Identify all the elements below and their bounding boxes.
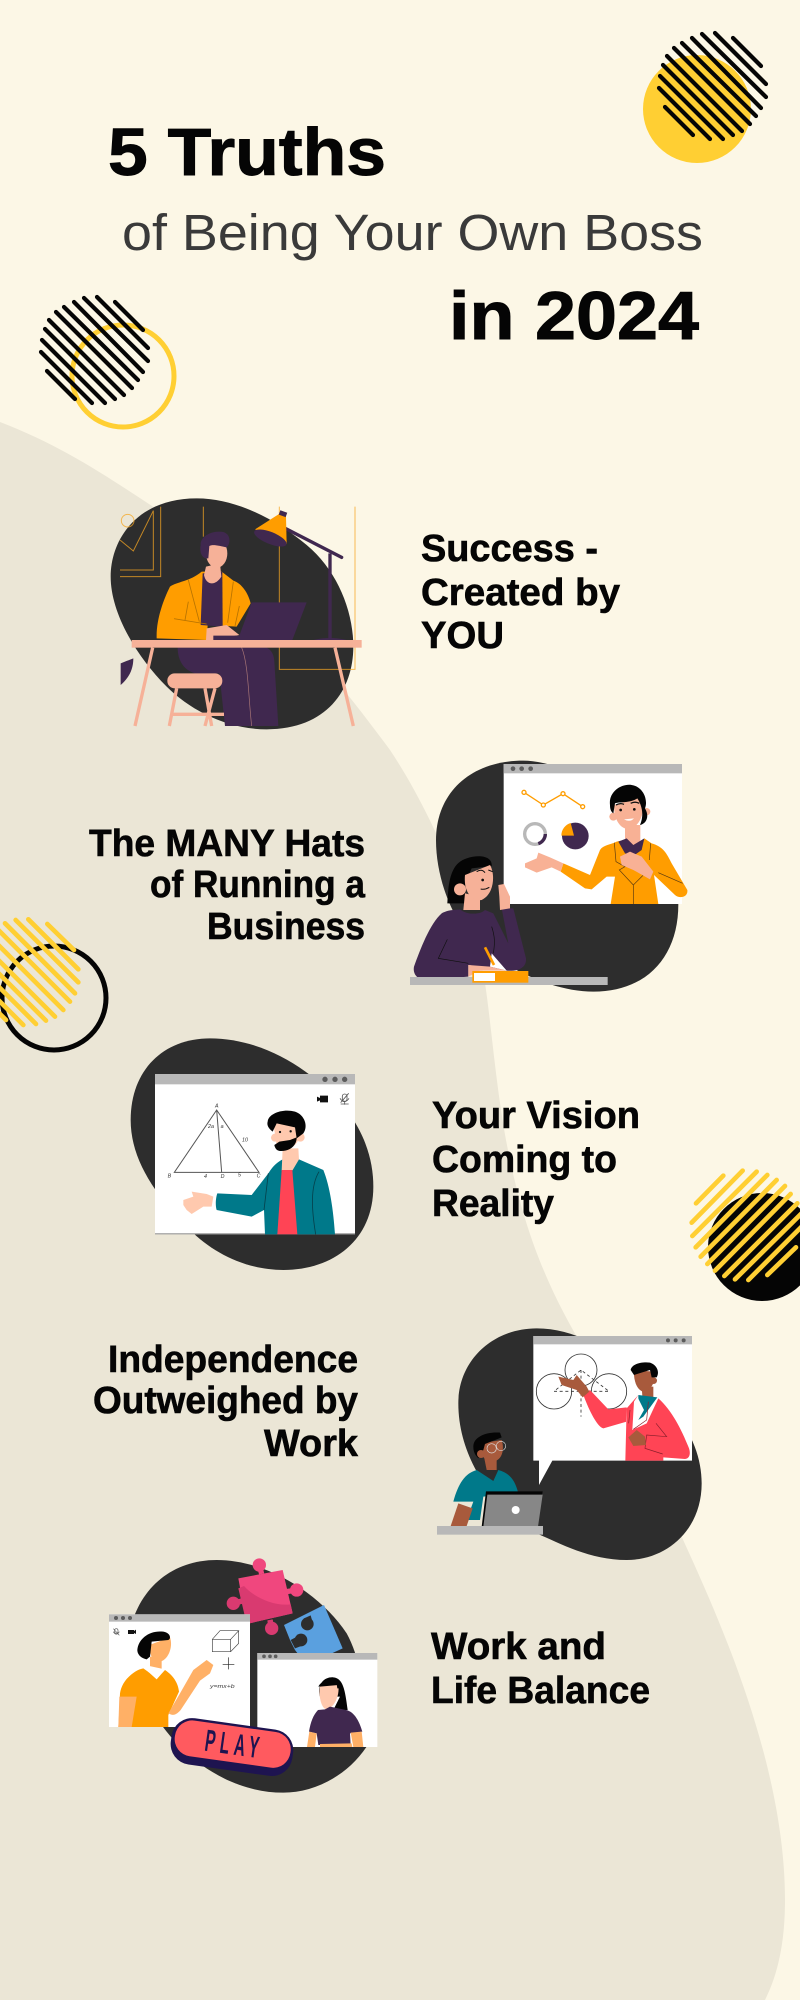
student <box>414 856 526 980</box>
window 1: woman teaching: y=mx+b <box>209 1684 235 1690</box>
illustration 1: woman working at desk <box>111 498 362 729</box>
heading: Success - Created by YOU: Success - <box>421 528 598 570</box>
illustration 3: man teaching geometry online <box>131 1038 373 1270</box>
illustration 5: video call, puzzle and play button <box>109 1558 377 1793</box>
triangle diagram: A <box>214 1104 219 1110</box>
heading: Your Vision Coming to Reality: Coming to <box>432 1139 617 1181</box>
title line: 5 Truths: 5 Truths <box>108 115 386 190</box>
puzzle piece: pink <box>227 1558 303 1635</box>
bearded man <box>183 1111 335 1234</box>
illustration 2: student watching online presentation <box>410 761 687 992</box>
line chart <box>522 790 585 809</box>
triangle diagram: a <box>221 1124 224 1130</box>
triangle diagram: B <box>168 1174 172 1180</box>
heading: Independence Outweighed by Work: Outweighed by <box>93 1380 358 1422</box>
woman <box>157 532 307 726</box>
window 2: woman listening <box>257 1653 377 1747</box>
heading: Success - Created by YOU: Created by <box>421 572 620 614</box>
presentation window <box>504 764 682 904</box>
heading: Your Vision Coming to Reality <box>432 1095 640 1225</box>
donut chart <box>525 824 545 844</box>
window 1: woman teaching <box>109 1614 250 1727</box>
heading: The MANY Hats of Running a Business: Business <box>207 906 365 948</box>
triangle diagram: 5 <box>238 1173 241 1179</box>
heading: Work and Life Balance: Life Balance <box>431 1670 650 1712</box>
heading: The MANY Hats of Running a Business: of Running a <box>150 864 366 906</box>
decoration: left black ring with yellow stripes <box>0 919 106 1050</box>
heading: Work and Life Balance: Work and <box>431 1626 606 1668</box>
circles diagram <box>536 1354 627 1417</box>
triangle diagram: D <box>221 1174 225 1180</box>
heading: Success - Created by YOU: YOU <box>421 615 504 657</box>
decoration: right black circle with yellow stripes <box>692 1171 800 1301</box>
heading: Your Vision Coming to Reality: Reality <box>432 1183 554 1225</box>
heading: Success - Created by YOU <box>421 528 620 657</box>
title <box>108 115 703 354</box>
speech bubble window <box>533 1336 692 1485</box>
heading: The MANY Hats of Running a Business: The MANY Hats <box>89 823 365 865</box>
heading: Independence Outweighed by Work: Work <box>264 1423 359 1465</box>
microphone icon <box>340 1093 349 1105</box>
heading: Independence Outweighed by Work <box>93 1339 359 1465</box>
triangle diagram: C <box>257 1174 261 1180</box>
triangle diagram: 2a <box>207 1124 214 1130</box>
heading: Work and Life Balance <box>431 1626 650 1712</box>
illustration 4: student with laptop and presenter <box>437 1328 702 1560</box>
student with laptop <box>437 1433 543 1535</box>
triangle diagram: 4 <box>204 1174 207 1180</box>
title line: of Being Your Own Boss: of Being Your Own Boss <box>122 204 703 261</box>
heading: Your Vision Coming to Reality: Your Vision <box>432 1095 640 1137</box>
camera icon <box>317 1096 328 1102</box>
lamp <box>252 510 347 640</box>
triangle diagram <box>168 1104 261 1180</box>
presenter <box>558 1362 690 1461</box>
presenter <box>525 785 687 904</box>
desk and stool <box>132 640 362 726</box>
background wave shape <box>0 422 785 2000</box>
heading: The MANY Hats of Running a Business <box>89 823 366 948</box>
play button <box>168 1715 296 1779</box>
video window <box>155 1074 355 1234</box>
puzzle piece: blue <box>284 1605 343 1665</box>
title line: in 2024: in 2024 <box>449 278 699 354</box>
heading: Independence Outweighed by Work: Independence <box>108 1339 358 1381</box>
decoration: left yellow ring with black stripes <box>41 297 174 427</box>
play button: PLAY <box>203 1724 261 1766</box>
pie chart <box>561 823 589 849</box>
decoration: top right yellow circle with black stripes <box>643 33 766 163</box>
triangle diagram: 10 <box>242 1137 248 1143</box>
desk and book <box>410 971 608 985</box>
